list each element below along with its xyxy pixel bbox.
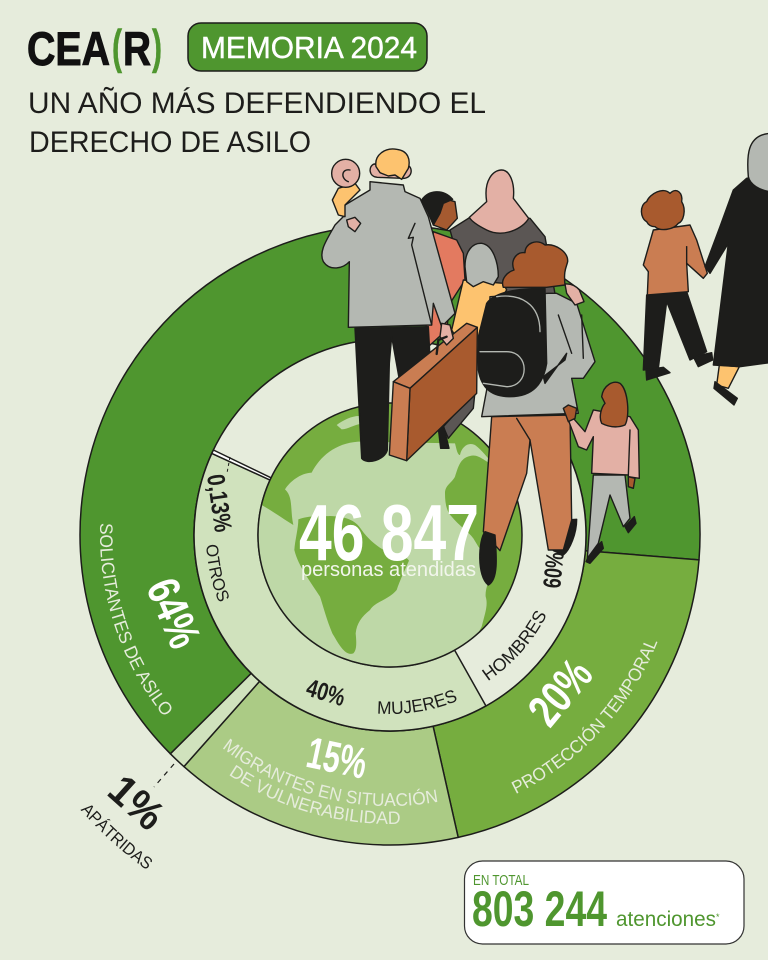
- segment: protección temporal 20%: [433, 551, 699, 837]
- label: protección temporal: PROTECCIÓN TEMPORAL: [511, 642, 658, 794]
- callout: total attentions: *: [716, 912, 720, 922]
- badge: memoria 2024: [188, 23, 427, 71]
- label: apátridas: 1%: [99, 766, 174, 839]
- person: woman with backpack: [478, 242, 595, 585]
- logo: CEAR: ): [152, 20, 162, 73]
- total people: 46 847: [299, 488, 479, 577]
- label: migrantes: MIGRANTES EN SITUACIÓN: [223, 738, 438, 806]
- callout: total attentions: 803 244: [472, 881, 607, 937]
- chart: outer donut by protection type: [80, 225, 700, 845]
- label: otros: [201, 456, 237, 602]
- label: mujeres: MUJERES: [378, 690, 456, 714]
- title: UN AÑO MÁS DEFENDIENDO EL: [28, 86, 486, 120]
- callout: total attentions: [464, 861, 744, 944]
- label: apátridas: [80, 764, 174, 868]
- callout: total attentions: EN TOTAL: [473, 872, 529, 889]
- label: otros: OTROS: [206, 544, 229, 602]
- label: solicitantes de asilo: SOLICITANTES DE ASILO: [100, 524, 172, 714]
- person: girl: [563, 382, 639, 563]
- label: protección temporal: 20%: [518, 648, 602, 736]
- title: [28, 86, 486, 159]
- globe: [252, 403, 522, 677]
- person: mother with hood: [705, 133, 768, 405]
- person: grey-haired woman: [452, 243, 507, 370]
- label: otros: 0,13%: [201, 472, 237, 534]
- segment: hombres 60%: [194, 339, 586, 731]
- badge: memoria 2024: MEMORIA 2024: [201, 30, 417, 65]
- title: DERECHO DE ASILO: [29, 126, 311, 159]
- globe outline: [258, 403, 522, 667]
- globe land light: [252, 442, 495, 677]
- callout: total attentions: atenciones: [616, 908, 716, 931]
- globe highlight: [337, 416, 361, 429]
- total people: personas atendidas: [301, 559, 476, 581]
- logo: CEAR: (: [112, 20, 122, 73]
- icon: suitcase: [389, 323, 477, 461]
- globe south america: [294, 516, 409, 654]
- label: hombres: HOMBRES: [482, 610, 546, 680]
- person: child holding hand: [641, 191, 713, 380]
- person: woman in coral: [422, 192, 465, 347]
- label: migrantes: 15%: [302, 728, 371, 789]
- segment: solicitantes de asilo 64%: [80, 225, 700, 754]
- chart: middle ring by gender: [194, 339, 586, 731]
- segment: otros 0,13%: [212, 450, 271, 480]
- segment: migrantes 15%: [184, 681, 458, 845]
- label: hombres: [482, 551, 570, 680]
- segment: mujeres 40%: [194, 453, 486, 731]
- label: solicitantes de asilo: 64%: [136, 571, 212, 655]
- logo: CEAR: R: [123, 22, 151, 75]
- label: apátridas: APÁTRIDAS: [80, 805, 152, 868]
- logo: CEAR: CEA: [27, 22, 110, 75]
- label: mujeres: 40%: [303, 674, 348, 712]
- segment: apátridas 1%: [170, 673, 260, 767]
- label: mujeres: [303, 674, 456, 714]
- label: solicitantes de asilo: [100, 524, 212, 714]
- label: migrantes: DE VULNERABILIDAD: [230, 765, 400, 824]
- illustration: group of people walking: [322, 133, 768, 585]
- person: man with baby and suitcase: [322, 149, 455, 461]
- person: woman with hijab: [438, 170, 557, 448]
- label: hombres: 60%: [538, 551, 570, 589]
